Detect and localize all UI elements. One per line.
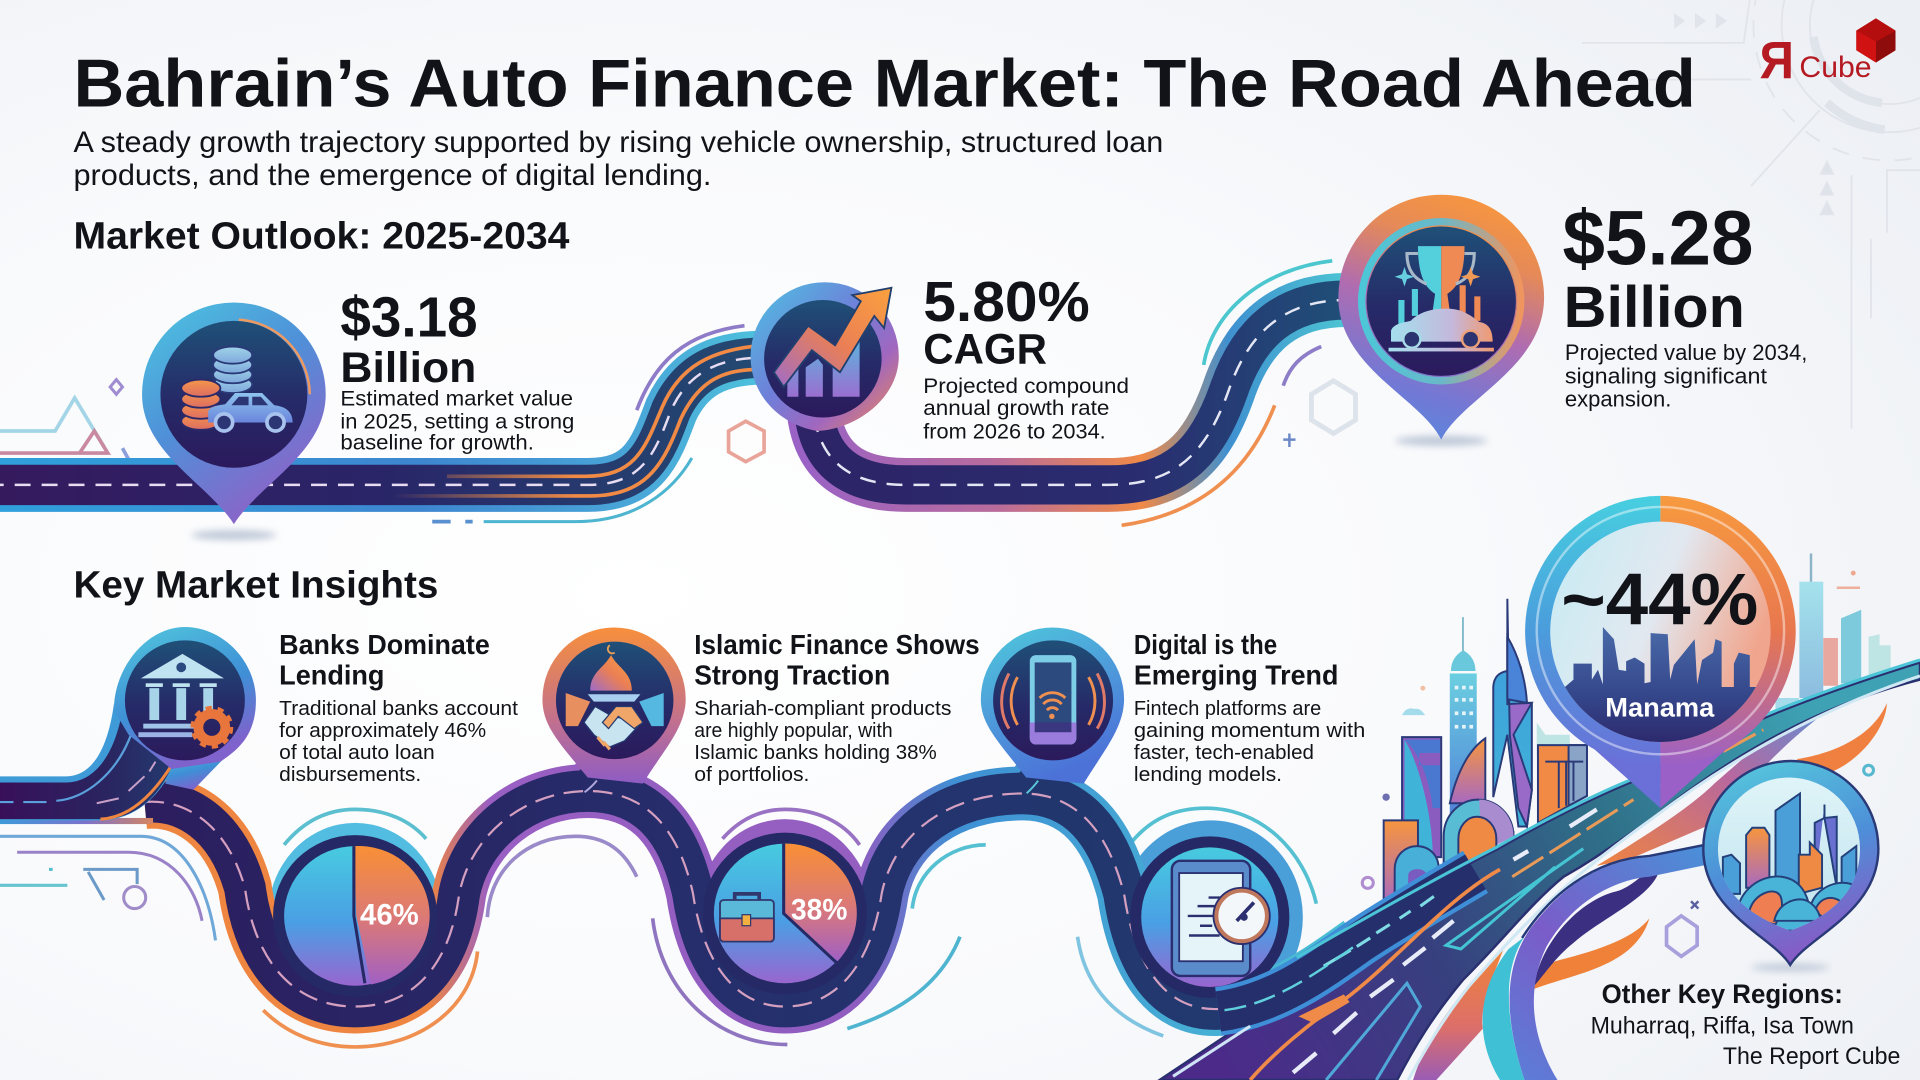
title: Bahrain’s Auto Finance Market: The Road Ahead [73, 47, 1696, 122]
stat: 5.80% CAGR: 5.80% [923, 270, 1090, 333]
text: other key regions [1591, 979, 1854, 1039]
swooshes under the highway [1413, 703, 1887, 1080]
pin: other regions [1703, 761, 1878, 971]
text: digital: Fintech platforms are [1134, 698, 1321, 720]
text: digital: gaining momentum with [1134, 720, 1365, 742]
text: other key regions: Muharraq, Riffa, Isa Town [1591, 1012, 1854, 1039]
subtitle [73, 126, 1163, 192]
icon: tablet [1172, 861, 1270, 976]
text: banks dominate lending: disbursements. [279, 764, 421, 786]
text: islamic finance: are highly popular, with [694, 720, 893, 742]
text: digital: Emerging Trend [1134, 659, 1338, 690]
connecting swoosh to other regions [1483, 845, 1708, 1080]
stat: 5.80% CAGR: from 2026 to 2034. [923, 419, 1106, 443]
pin: digital [981, 628, 1124, 784]
icon: rising chart arrow [774, 288, 891, 397]
icon: mosque and handshake [566, 645, 664, 749]
decoration: left lines [0, 380, 137, 480]
pin: banks [114, 627, 256, 769]
pie chart: 38% with briefcase [703, 833, 867, 994]
pie chart: 38% with briefcase: 38% [791, 894, 847, 927]
text: digital: faster, tech-enabled [1134, 742, 1314, 764]
pie chart: 46%: 46% [360, 898, 419, 931]
stat: $3.18 Billion: in 2025, setting a strong [340, 410, 574, 434]
decoration: lower left lines [0, 836, 216, 940]
pie chart: 46% [273, 835, 437, 997]
pin: projected 2034 [1338, 195, 1544, 446]
pin: manama share: Manama [1605, 692, 1715, 722]
chart halo arcs [263, 808, 1316, 1047]
text: banks dominate lending: Banks Dominate [279, 629, 490, 660]
background tech pattern [1582, 0, 1920, 429]
winding insights road [144, 735, 1359, 1009]
text: islamic finance: of portfolios. [694, 764, 809, 786]
stat: $5.28 Billion: $5.28 [1562, 195, 1753, 281]
icon: phone with wifi [1002, 655, 1104, 744]
stat: 5.80% CAGR: annual growth rate [923, 396, 1109, 420]
accents near other regions [1667, 765, 1873, 956]
icon: hexagons and sparkles [729, 381, 1356, 462]
text: banks dominate lending: of total auto loan [279, 742, 435, 764]
stat: $3.18 Billion: Billion [340, 344, 476, 392]
stat: $5.28 Billion [1562, 195, 1807, 412]
heading: key market insights: Key Market Insights [73, 565, 438, 607]
text: islamic finance: Islamic banks holding 38% [694, 742, 937, 764]
text: other key regions: Other Key Regions: [1602, 979, 1843, 1009]
road entering from left [0, 704, 233, 824]
icon: trophy and car [1389, 246, 1494, 351]
text: banks dominate lending [279, 629, 518, 786]
text: digital: lending models. [1134, 764, 1282, 786]
road segment 2 [814, 261, 1347, 525]
skyline inside pin [1565, 627, 1756, 742]
logo: RCube: Я [1760, 31, 1794, 90]
skyline right pale [1776, 553, 1891, 735]
stat: 5.80% CAGR [923, 270, 1129, 443]
stat: $3.18 Billion: baseline for growth. [340, 430, 534, 454]
stat: $5.28 Billion: Projected value by 2034, [1565, 340, 1807, 365]
subtitle: products, and the emergence of digital lending. [73, 159, 711, 192]
skyline left [1362, 599, 1587, 904]
text: digital: Digital is the [1134, 629, 1277, 660]
stat: 5.80% CAGR: Projected compound [923, 374, 1129, 398]
stat: $5.28 Billion: Billion [1564, 275, 1745, 340]
stat: 5.80% CAGR: CAGR [923, 326, 1047, 374]
pin: manama share [1525, 496, 1796, 808]
heading: market outlook: Market Outlook: 2025-2034 [73, 216, 569, 258]
stat: $3.18 Billion [340, 286, 574, 454]
stat: $5.28 Billion: expansion. [1565, 387, 1671, 412]
icon: small skyline [1723, 793, 1864, 931]
highway [1160, 660, 1920, 1080]
text: islamic finance: Shariah-compliant products [694, 698, 951, 720]
text: banks dominate lending: Traditional banks account [279, 698, 518, 720]
icon: bank with gear [138, 654, 231, 746]
text: digital [1134, 629, 1365, 786]
pin: market value 2025 [142, 302, 326, 540]
text: islamic finance [694, 629, 980, 786]
stat: $3.18 Billion: $3.18 [340, 286, 478, 349]
dial: tablet and gauge [1130, 836, 1289, 998]
pin: islamic finance [542, 628, 686, 784]
logo: RCube: Cube [1799, 51, 1872, 84]
pin: manama share: ~44% [1561, 557, 1758, 640]
stat: $5.28 Billion: signaling significant [1565, 363, 1767, 388]
icon: briefcase [720, 894, 774, 942]
text: islamic finance: Strong Traction [694, 659, 890, 690]
text: banks dominate lending: Lending [279, 659, 384, 690]
pin: CAGR [751, 282, 899, 431]
source credit: The Report Cube [1723, 1043, 1900, 1070]
text: banks dominate lending: for approximately 46% [279, 720, 486, 742]
logo: RCube [1760, 18, 1896, 90]
text: islamic finance: Islamic Finance Shows [694, 629, 980, 660]
stat: $3.18 Billion: Estimated market value [340, 386, 573, 410]
icon: coins and car [181, 347, 293, 431]
subtitle: A steady growth trajectory supported by rising vehicle ownership, structured loan [73, 126, 1163, 159]
road segment 1 [0, 326, 765, 522]
